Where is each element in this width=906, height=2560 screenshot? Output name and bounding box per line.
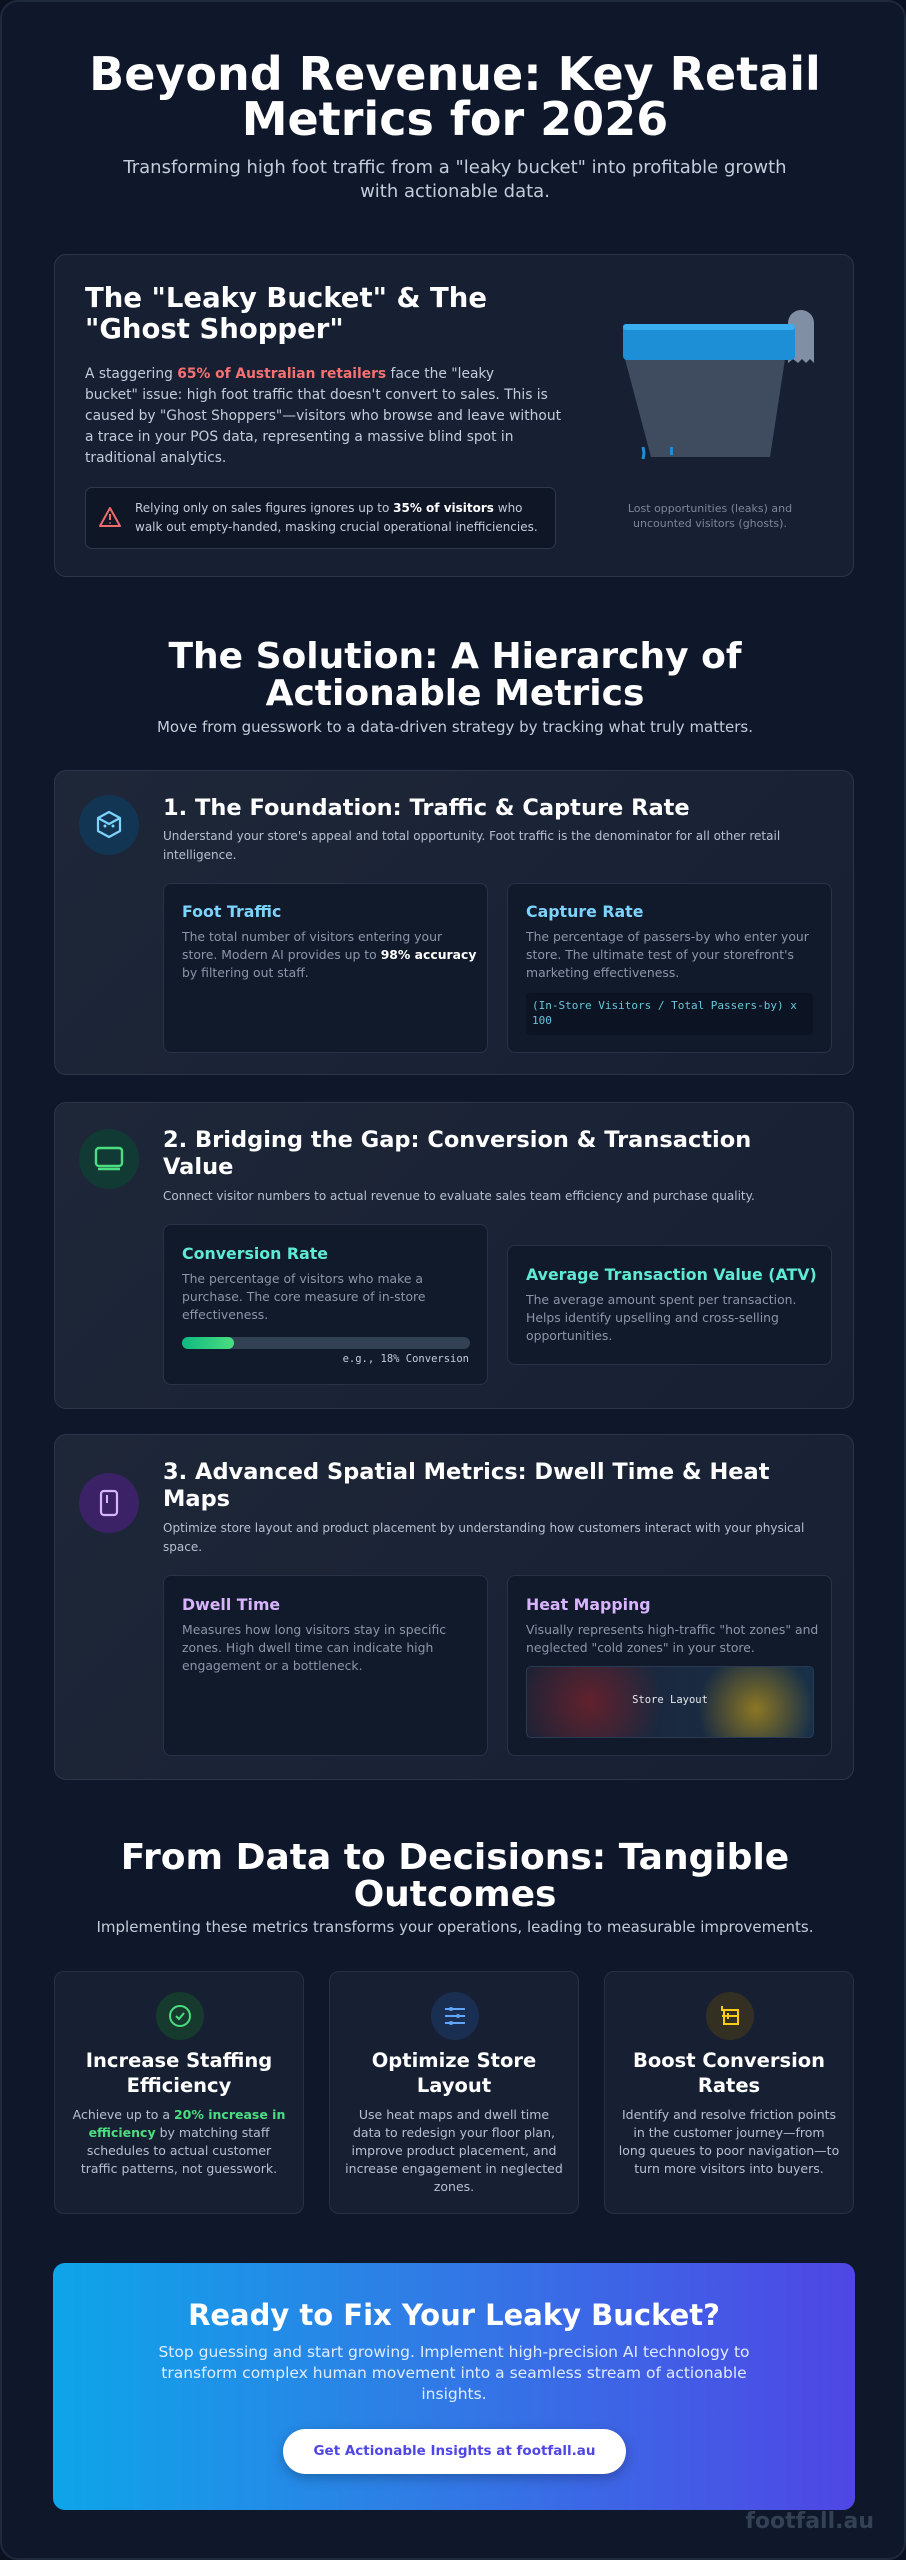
heading: 3. Advanced Spatial Metrics: Dwell Time & Heat [163, 1459, 770, 1485]
subcard: foot traffic: store. Modern AI provides up to 98% accuracy [182, 947, 476, 962]
title: Beyond Revenue: Key Retail [89, 47, 821, 101]
heading [163, 1127, 751, 1180]
outcome: store layout: Use heat maps and dwell time [359, 2107, 549, 2122]
subcard: dwell time: Measures how long visitors stay in specific zones. High dwell time can indicate high engagement or a bottleneck. [182, 1622, 446, 1673]
CTA button [283, 2429, 626, 2474]
CTA panel [53, 2263, 855, 2510]
subcard: foot traffic: The total number of visitors entering your [182, 929, 442, 944]
description: Optimize store layout and product placement by understanding how customers interact with your physical space. [163, 1521, 804, 1554]
subcard: foot traffic [163, 883, 488, 1053]
heading: The "Leaky Bucket" & The [85, 282, 487, 314]
icon: cube [79, 795, 139, 855]
subcard: dwell time: Dwell Time [182, 1595, 280, 1614]
outcome: conversion: long queues to poor navigation—to [619, 2143, 839, 2158]
outcome: staffing: efficiency by matching staff [89, 2125, 269, 2140]
subcard: foot traffic: Foot Traffic [182, 902, 281, 921]
subtitle [123, 157, 787, 202]
outcome: store layout: improve product placement, and [352, 2143, 556, 2158]
heading [85, 282, 487, 345]
subcard: conversion rate [163, 1224, 488, 1385]
outcome: conversion: turn more visitors into buyers. [634, 2161, 824, 2176]
outcome: conversion: Rates [698, 2074, 760, 2097]
outcome: staffing: Efficiency [127, 2074, 231, 2097]
subcard: conversion rate: The percentage of visitors who make a purchase. The core measure of in-store effectiveness. [182, 1271, 425, 1322]
body text: A staggering 65% of Australian retailers face the "leaky [85, 366, 494, 382]
body text: traditional analytics. [85, 450, 226, 466]
section title: outcomes: Outcomes [354, 1874, 556, 1915]
icon: check badge [156, 1992, 204, 2040]
CTA button: Get Actionable Insights at footfall.au [313, 2443, 596, 2459]
heading: Value [163, 1154, 233, 1180]
heat map visual [526, 1666, 814, 1738]
icon: sliders [431, 1992, 479, 2040]
icon: basket [706, 1992, 754, 2040]
subcard: ATV [507, 1245, 832, 1365]
outcome: store layout: Layout [417, 2074, 491, 2097]
subcard: heat mapping: neglected "cold zones" in your store. [526, 1640, 755, 1655]
subcard: capture rate: The percentage of passers-by who enter your store. The ultimate test of your storefront's marketing effectiveness. [526, 929, 809, 980]
heading: "Ghost Shopper" [85, 313, 344, 345]
subcard: heat mapping [507, 1575, 832, 1756]
subcard: capture rate [507, 883, 832, 1053]
outcome: conversion [604, 1971, 854, 2214]
title [89, 47, 821, 146]
outcome: staffing [54, 1971, 304, 2214]
description: Connect visitor numbers to actual revenue to evaluate sales team efficiency and purchase quality. [163, 1189, 755, 1203]
outcome: conversion: Identify and resolve friction points [622, 2107, 836, 2122]
outcome: conversion: in the customer journey—from [633, 2125, 825, 2140]
callout: warning [85, 487, 556, 549]
icon: phone [79, 1473, 139, 1533]
heading: Maps [163, 1486, 230, 1512]
body text: bucket" issue: high foot traffic that doesn't convert to sales. This is [85, 387, 548, 403]
section title: solution: Actionable Metrics [266, 673, 644, 714]
title: Metrics for 2026 [242, 92, 668, 146]
outcome: store layout [329, 1971, 579, 2214]
outcome: staffing: schedules to actual customer [87, 2143, 271, 2158]
panel: leaky bucket [54, 254, 854, 577]
callout text [135, 501, 538, 534]
body text: caused by "Ghost Shoppers"—visitors who browse and leave without [85, 408, 561, 424]
CTA text: Stop guessing and start growing. Implement high-precision AI technology to transform complex human movement into a seamless stream of actionable insights. [158, 2343, 750, 2403]
section title: solution: The Solution: A Hierarchy of [168, 636, 742, 677]
formula [526, 993, 813, 1035]
body text: a trace in your POS data, representing a massive blind spot in [85, 429, 513, 445]
subtitle: Transforming high foot traffic from a "leaky bucket" into profitable growth [123, 157, 787, 178]
heat map visual: Store Layout [632, 1694, 708, 1706]
outcome: store layout: data to redesign your floor plan, [353, 2125, 555, 2140]
description: Understand your store's appeal and total opportunity. Foot traffic is the denominator for all other retail intelligence. [163, 829, 780, 862]
panel: foundation [54, 770, 854, 1075]
subcard: ATV: The average amount spent per transaction. Helps identify upselling and cross-selling opportunities. [526, 1292, 796, 1343]
heading: 1. The Foundation: Traffic & Capture Rate [163, 795, 690, 821]
heading [163, 1459, 770, 1512]
heading: 2. Bridging the Gap: Conversion & Transaction [163, 1127, 751, 1153]
subcard: heat mapping: Visually represents high-traffic "hot zones" and [526, 1622, 818, 1637]
bar label: e.g., 18% Conversion [343, 1353, 469, 1365]
bar chart: conversion [182, 1337, 470, 1349]
panel: spatial metrics [54, 1434, 854, 1780]
subcard: foot traffic: by filtering out staff. [182, 965, 309, 980]
section subtitle: Implementing these metrics transforms your operations, leading to measurable improvements. [96, 1918, 813, 1936]
subtitle: with actionable data. [360, 181, 550, 202]
outcome: conversion: Boost Conversion [633, 2049, 825, 2072]
callout text: walk out empty-handed, masking crucial operational inefficiencies. [135, 520, 538, 534]
section title: solution [168, 636, 742, 714]
panel: bridging the gap [54, 1102, 854, 1409]
icon: leaky bucket with ghost [623, 310, 814, 460]
outcome: staffing: Increase Staffing [86, 2049, 272, 2072]
formula: (In-Store Visitors / Total Passers-by) x 100 [532, 999, 797, 1027]
section title: outcomes: From Data to Decisions: Tangible [121, 1837, 789, 1878]
subcard: capture rate: Capture Rate [526, 902, 643, 921]
icon: warning [99, 507, 121, 527]
CTA heading: Ready to Fix Your Leaky Bucket? [188, 2298, 720, 2332]
body text [85, 366, 561, 466]
callout text: Relying only on sales figures ignores up to 35% of visitors who [135, 501, 523, 515]
section subtitle: Move from guesswork to a data-driven strategy by tracking what truly matters. [157, 718, 753, 736]
outcome: staffing: Achieve up to a 20% increase in [73, 2107, 285, 2122]
outcome: store layout: increase engagement in neglected [345, 2161, 563, 2176]
watermark: footfall.au [745, 2509, 874, 2534]
subcard: ATV: Average Transaction Value (ATV) [526, 1265, 817, 1284]
outcome: store layout: zones. [434, 2179, 474, 2194]
caption: Lost opportunities (leaks) and uncounted visitors (ghosts). [628, 502, 792, 530]
outcome: staffing: traffic patterns, not guesswork. [81, 2161, 277, 2176]
subcard: heat mapping: Heat Mapping [526, 1595, 651, 1614]
subcard: conversion rate: Conversion Rate [182, 1244, 328, 1263]
outcome: store layout: Optimize Store [372, 2049, 536, 2072]
section title: outcomes [121, 1837, 789, 1915]
icon: screen [79, 1129, 139, 1189]
subcard: dwell time [163, 1575, 488, 1756]
